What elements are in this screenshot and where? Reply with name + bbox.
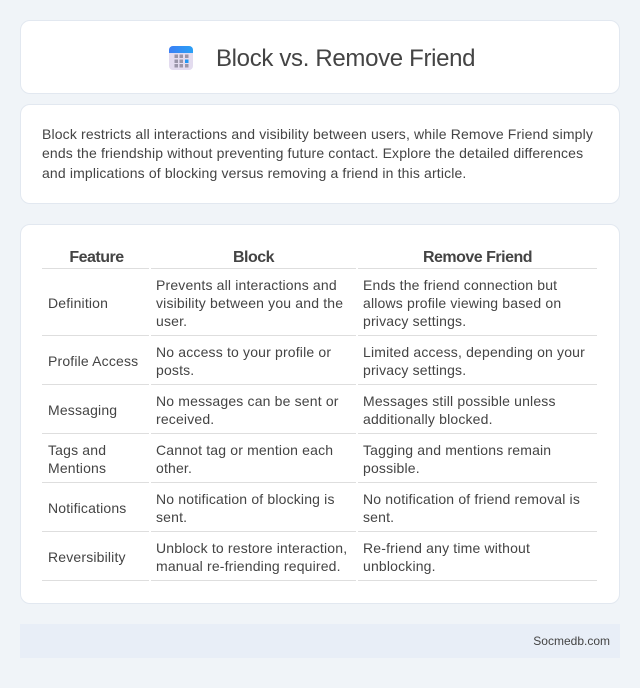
intro text: ends the friendship without preventing future contact. Explore the detailed differences xyxy=(42,145,583,161)
row: Notifications: sent. xyxy=(156,509,187,525)
row: Messaging: Messages still possible unless xyxy=(363,393,556,409)
row: Definition: allows profile viewing based on xyxy=(363,295,561,311)
footer credit: Socmedb.com xyxy=(533,634,610,648)
row: Definition xyxy=(48,277,561,329)
row: Messaging: No messages can be sent or xyxy=(156,393,339,409)
panel: intro xyxy=(20,104,620,204)
row: Reversibility: unblocking. xyxy=(363,558,436,574)
table header: Block xyxy=(233,249,274,266)
row: Notifications: No notification of blocking is xyxy=(156,491,335,507)
table header: Feature xyxy=(69,249,124,266)
row: Reversibility: Reversibility xyxy=(48,549,126,565)
row: Profile Access: Limited access, depending on your xyxy=(363,344,585,360)
row: Tags and Mentions: possible. xyxy=(363,460,420,476)
row: Definition: Prevents all interactions and xyxy=(156,277,337,293)
row: Reversibility xyxy=(48,540,530,574)
row: Tags and Mentions xyxy=(48,442,551,476)
intro text xyxy=(42,126,593,181)
row: Messaging xyxy=(48,393,556,427)
row: Messaging: additionally blocked. xyxy=(363,411,493,427)
row: Reversibility: Unblock to restore interaction, xyxy=(156,540,347,556)
row: Profile Access: No access to your profile or xyxy=(156,344,331,360)
icon: calendar xyxy=(169,46,193,70)
row: Definition: privacy settings. xyxy=(363,313,466,329)
row: Definition: user. xyxy=(156,313,187,329)
row: Definition: Definition xyxy=(48,295,108,311)
row: Definition: Ends the friend connection but xyxy=(363,277,557,293)
row: Profile Access: posts. xyxy=(156,362,194,378)
intro text: and implications of blocking versus removing a friend in this article. xyxy=(42,165,466,181)
table header xyxy=(69,249,532,266)
row: Tags and Mentions: Tagging and mentions remain xyxy=(363,442,551,458)
row: Messaging: Messaging xyxy=(48,402,117,418)
row: Profile Access: Profile Access xyxy=(48,353,138,369)
row: Tags and Mentions: other. xyxy=(156,460,192,476)
row: Tags and Mentions: Tags and xyxy=(48,442,106,458)
title: Block vs. Remove Friend xyxy=(216,45,475,72)
row: Notifications: sent. xyxy=(363,509,394,525)
row: Definition: visibility between you and the xyxy=(156,295,343,311)
panel: title card xyxy=(20,20,620,94)
row: Notifications: No notification of friend removal is xyxy=(363,491,580,507)
intro text: Block restricts all interactions and visibility between users, while Remove Friend simply xyxy=(42,126,593,142)
row: Tags and Mentions: Cannot tag or mention each xyxy=(156,442,333,458)
row: Messaging: received. xyxy=(156,411,214,427)
row: Notifications xyxy=(48,491,580,525)
table header: Remove Friend xyxy=(423,249,532,266)
row: Profile Access: privacy settings. xyxy=(363,362,466,378)
row: Tags and Mentions: Mentions xyxy=(48,460,106,476)
footer bar xyxy=(20,624,620,658)
row: Reversibility: manual re-friending required. xyxy=(156,558,341,574)
row: Reversibility: Re-friend any time without xyxy=(363,540,530,556)
panel: comparison table xyxy=(20,224,620,604)
row: Profile Access xyxy=(48,344,585,378)
row: Notifications: Notifications xyxy=(48,500,126,516)
